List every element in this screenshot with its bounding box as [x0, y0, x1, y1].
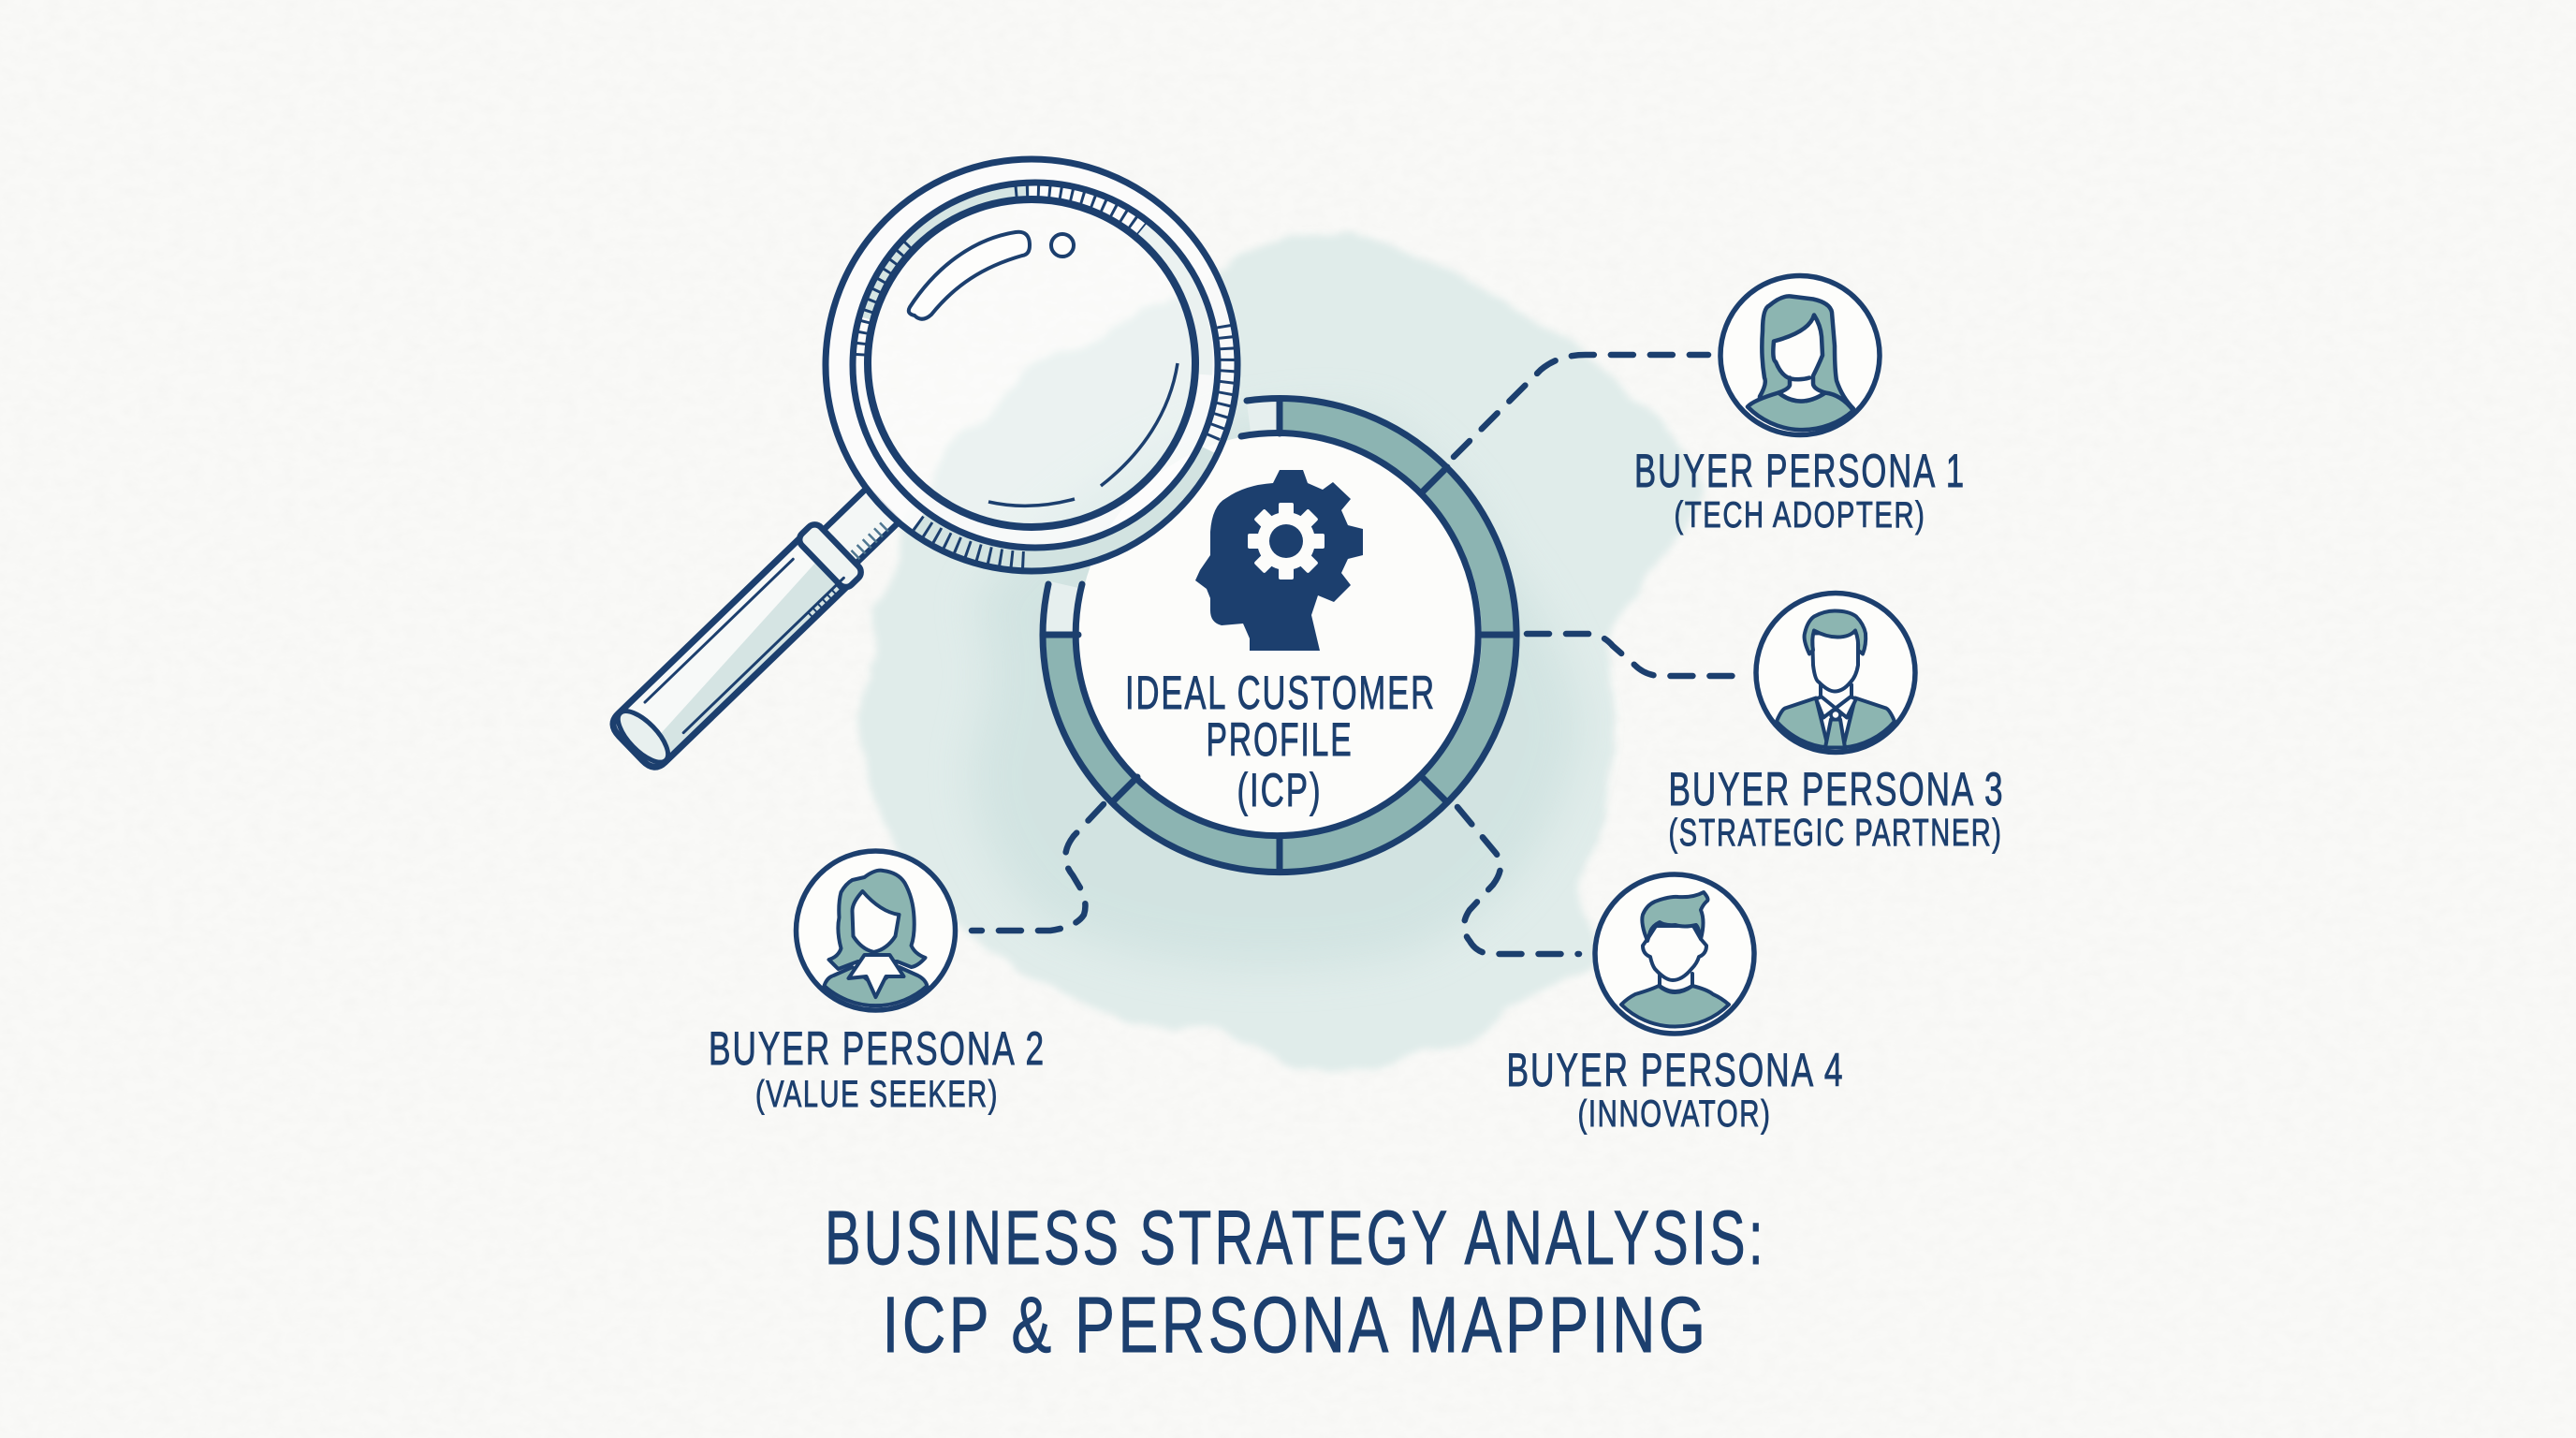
icon: tech adopter avatar — [1720, 275, 1880, 434]
icon: head with gear — [1195, 470, 1363, 651]
ICP label — [1125, 667, 1436, 816]
persona 4 — [1507, 874, 1844, 1135]
persona 2 — [709, 851, 1046, 1115]
ICP label: PROFILE — [1206, 713, 1354, 766]
connector: ICP to persona 4 — [1457, 807, 1579, 954]
persona 1 — [1634, 275, 1966, 536]
ICP label: (ICP) — [1237, 764, 1322, 816]
magnifier handle — [607, 479, 907, 774]
connector: ICP to persona 3 — [1527, 634, 1736, 676]
connector: ICP to persona 2 — [972, 804, 1104, 931]
icon: magnifying glass — [607, 159, 1237, 774]
lens highlights — [909, 232, 1178, 506]
persona 4 role: (INNOVATOR) — [1578, 1093, 1771, 1135]
persona 3 — [1668, 594, 2005, 854]
magnifier lens — [868, 199, 1195, 527]
ICP label: IDEAL CUSTOMER — [1125, 667, 1436, 719]
persona 3 name: BUYER PERSONA 3 — [1668, 763, 2005, 815]
magnifier rim bands — [857, 190, 1228, 560]
persona 2 role: (VALUE SEEKER) — [755, 1074, 999, 1115]
connector: ICP to persona 1 — [1454, 355, 1708, 457]
persona 3 role: (STRATEGIC PARTNER) — [1668, 811, 2003, 854]
persona 1 name: BUYER PERSONA 1 — [1634, 445, 1966, 497]
persona 4 name: BUYER PERSONA 4 — [1507, 1044, 1844, 1096]
ICP segmented ring — [1043, 399, 1516, 873]
magnifier glass disc — [847, 181, 1216, 550]
magnifier frame rings — [826, 159, 1237, 571]
icon: strategic partner avatar — [1756, 594, 1915, 753]
persona 2 name: BUYER PERSONA 2 — [709, 1022, 1046, 1075]
title — [825, 1196, 1766, 1369]
persona 1 role: (TECH ADOPTER) — [1674, 495, 1926, 536]
title: BUSINESS STRATEGY ANALYSIS: — [825, 1196, 1766, 1281]
watercolor wash — [862, 235, 1696, 1078]
icon: value seeker avatar — [796, 851, 955, 1010]
title: ICP & PERSONA MAPPING — [882, 1281, 1709, 1369]
icon: innovator avatar — [1595, 874, 1754, 1034]
